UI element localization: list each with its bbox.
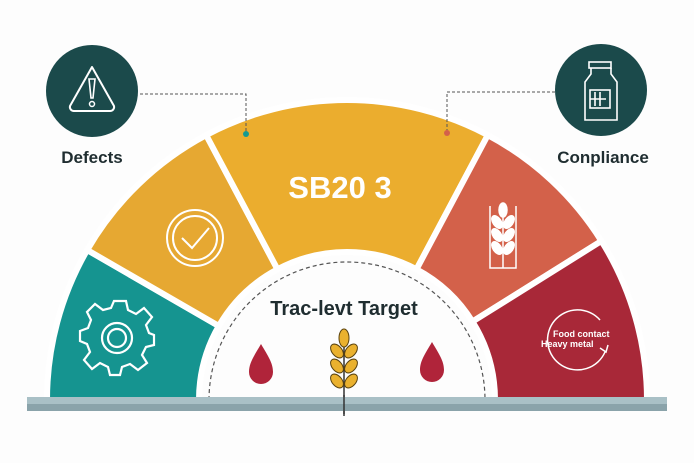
icon: wheat center [328, 329, 360, 414]
icon: drop right [420, 342, 444, 382]
base bar [27, 397, 667, 411]
icon circle: compliance bottle [555, 44, 647, 136]
gauge segment: red [472, 241, 647, 400]
callout connector: defects [140, 94, 246, 132]
label: Defects: Defects [61, 148, 123, 167]
title: SB20 3: SB20 3 [288, 170, 392, 205]
icon: check circle [167, 210, 223, 266]
icon: drop left [249, 344, 273, 384]
dashed inner circle [209, 262, 485, 400]
gauge segment: yellow center [206, 100, 488, 269]
icon: wheat in frame [490, 203, 516, 268]
icon: gear [80, 301, 154, 375]
subtitle: Trac-levt Target: Trac-levt Target [270, 298, 418, 320]
callout connector: compliance [447, 92, 555, 131]
gauge segment: teal [47, 250, 219, 400]
gauge segment: yellow left [87, 135, 278, 326]
icon: circular arrow with text: Food contact [553, 329, 610, 339]
gauge segment: orange [416, 135, 601, 322]
label: Conpliance: Conpliance [557, 148, 649, 167]
icon: circular arrow with text: Heavy metal [541, 339, 594, 349]
icon circle: defects warning [46, 45, 138, 137]
icon: circular arrow with text [541, 310, 610, 370]
